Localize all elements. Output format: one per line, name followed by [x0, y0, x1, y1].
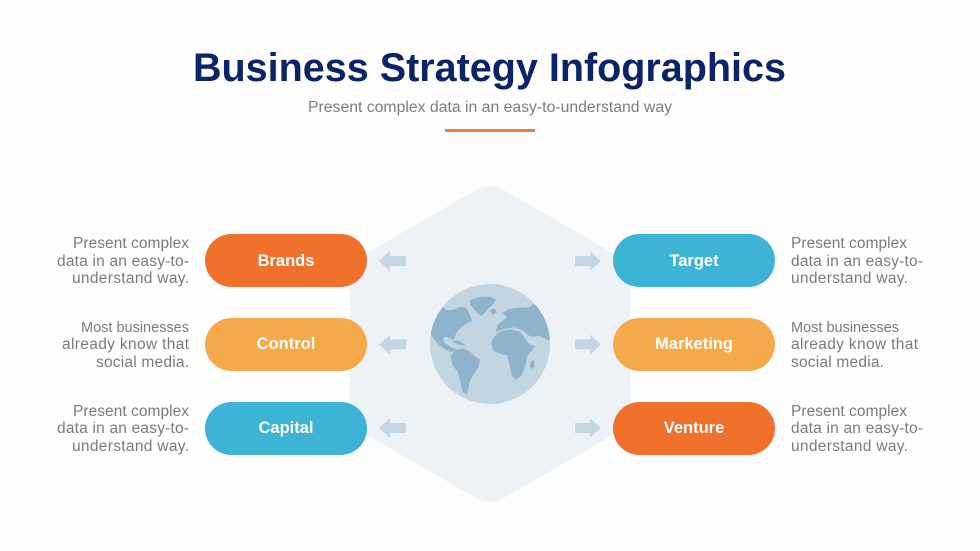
- arrow: Venture: [575, 418, 601, 438]
- text: Brands description: data in an easy-to-: [57, 253, 189, 270]
- title: Business Strategy Infographics: [193, 46, 786, 90]
- text: Control description: already know that: [62, 336, 190, 353]
- text: Marketing description: [791, 320, 919, 371]
- subtitle: Present complex data in an easy-to-understand way: [308, 99, 672, 116]
- pill: Target: Target: [669, 252, 719, 270]
- text: Venture description: understand way.: [791, 438, 908, 455]
- pill: Marketing: [613, 318, 775, 371]
- arrow: Control: [379, 334, 406, 354]
- pill: Control: [205, 318, 367, 371]
- text: Capital description: understand way.: [72, 438, 189, 455]
- pill: Control: Control: [257, 335, 315, 353]
- pill: Venture: [613, 402, 775, 455]
- text: Capital description: Present complex: [73, 403, 189, 420]
- pill: Capital: Capital: [258, 419, 314, 437]
- pill: Capital: [205, 402, 367, 455]
- pill: Marketing: Marketing: [655, 335, 733, 353]
- pill: Brands: [205, 234, 367, 287]
- arrow: Marketing: [575, 334, 601, 354]
- text: Marketing description: social media.: [791, 354, 884, 371]
- text: Control description: [62, 320, 190, 371]
- arrow: Target: [575, 251, 601, 271]
- arrow: Capital: [379, 418, 406, 438]
- text: Venture description: [791, 403, 923, 455]
- text: Control description: social media.: [96, 354, 189, 371]
- text: Target description: data in an easy-to-: [791, 253, 923, 270]
- text: Venture description: data in an easy-to-: [791, 420, 923, 437]
- icon: globe: [430, 284, 551, 404]
- text: Target description: [791, 235, 923, 287]
- text: Brands description: Present complex: [73, 235, 189, 252]
- text: Brands description: [57, 235, 189, 287]
- title accent bar: [445, 129, 535, 132]
- text: Target description: Present complex: [791, 235, 907, 252]
- text: Marketing description: already know that: [791, 336, 919, 353]
- text: Marketing description: Most businesses: [791, 320, 899, 336]
- text: Control description: Most businesses: [81, 320, 189, 336]
- pill: Brands: Brands: [258, 252, 314, 270]
- text: Brands description: understand way.: [72, 270, 189, 287]
- arrow: Brands: [379, 251, 406, 271]
- text: Venture description: Present complex: [791, 403, 907, 420]
- pill: Target: [613, 234, 775, 287]
- text: Capital description: data in an easy-to-: [57, 420, 189, 437]
- hexagon background: [376, 212, 604, 476]
- text: Target description: understand way.: [791, 270, 908, 287]
- text: Capital description: [57, 403, 189, 455]
- pill: Venture: Venture: [664, 419, 724, 437]
